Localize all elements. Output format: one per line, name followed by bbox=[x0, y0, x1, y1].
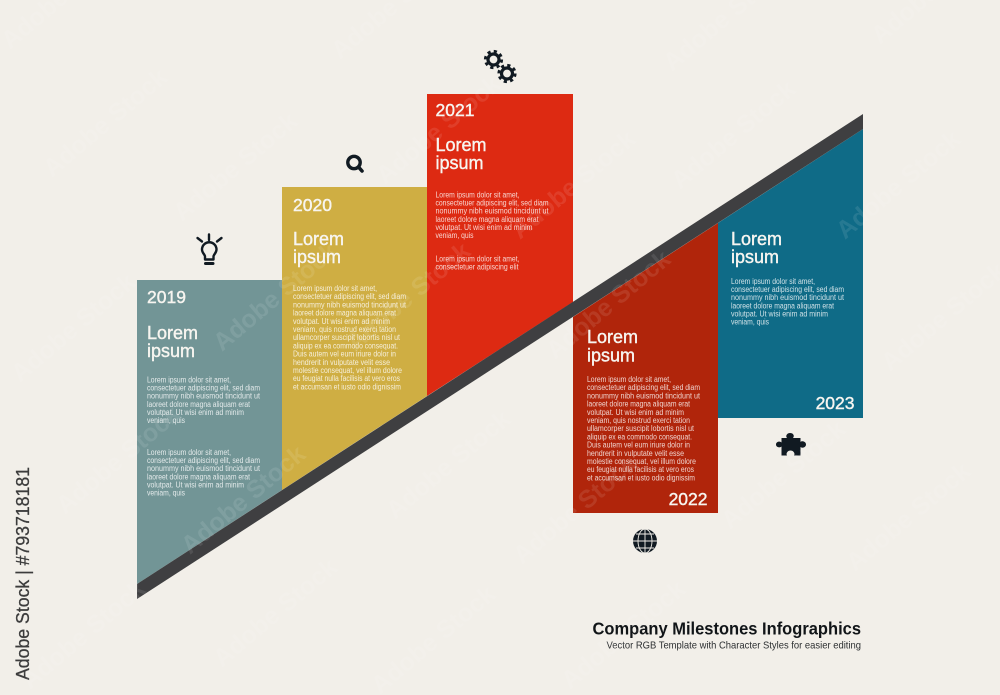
watermarks: Adobe Stock bbox=[541, 245, 676, 365]
watermarks: Adobe Stock bbox=[716, 415, 851, 535]
subtitle: Vector RGB Template with Character Styles for easier editing bbox=[606, 640, 861, 652]
panel: 2022: Lorem ipsum dolor sit amet, bbox=[587, 375, 671, 384]
panel: 2022 bbox=[573, 223, 718, 513]
watermarks: Adobe Stock bbox=[208, 553, 343, 673]
panel: 2020: eu feugiat nulla facilisis at vero eros bbox=[293, 374, 400, 383]
panel: 2019: Lorem bbox=[147, 323, 198, 343]
panel: 2020 bbox=[282, 187, 427, 490]
panel: 2021: consectetuer adipiscing elit bbox=[436, 263, 519, 272]
panel: 2021: Lorem bbox=[436, 135, 487, 155]
icon: gears bbox=[485, 51, 515, 82]
panel: 2021: consectetuer adipiscing elit, sed diam bbox=[436, 199, 548, 208]
panel: 2023: nonummy nibh euismod tincidunt ut bbox=[731, 293, 845, 302]
panel: 2021: ipsum bbox=[436, 153, 484, 173]
panel: 2022: nonummy nibh euismod tincidunt ut bbox=[587, 391, 701, 400]
panel: 2020: aliquip ex ea commodo consequat. bbox=[293, 341, 398, 350]
panel: 2022: Lorem bbox=[587, 327, 638, 347]
panel: 2023: 2023 bbox=[816, 393, 854, 413]
panel: 2019: volutpat. Ut wisi enim ad minim bbox=[147, 408, 244, 417]
panel: 2021: laoreet dolore magna aliquam erat bbox=[436, 215, 539, 224]
panel: 2023: Lorem ipsum dolor sit amet, bbox=[731, 277, 815, 286]
panel: 2019: laoreet dolore magna aliquam erat bbox=[147, 472, 251, 481]
panel: 2019: consectetuer adipiscing elit, sed diam bbox=[147, 456, 260, 465]
panel: 2020: 2020 bbox=[293, 195, 332, 215]
panel: 2020: ullamcorper suscipit lobortis nisl ut bbox=[293, 333, 401, 342]
panel: 2020: Lorem ipsum dolor sit amet, bbox=[293, 284, 377, 293]
watermarks: Adobe Stock bbox=[168, 107, 303, 227]
watermarks: Adobe Stock bbox=[508, 450, 643, 570]
panel: 2020: nonummy nibh euismod tincidunt ut bbox=[293, 300, 407, 309]
icon: magnifier bbox=[348, 156, 362, 171]
panel: 2020: laoreet dolore magna aliquam erat bbox=[293, 309, 397, 318]
icon: light bulb bbox=[198, 234, 222, 264]
panel: 2019: Lorem ipsum dolor sit amet, bbox=[147, 376, 231, 384]
panel: 2022: Duis autem vel eum iriure dolor in bbox=[587, 441, 690, 450]
panel: 2021 bbox=[427, 94, 573, 396]
panel: 2021: Lorem ipsum dolor sit amet, bbox=[436, 190, 520, 200]
panel: 2021: volutpat. Ut wisi enim ad minim bbox=[436, 223, 532, 232]
stock id: Adobe Stock | #793718181 bbox=[12, 467, 33, 680]
panel: 2022: eu feugiat nulla facilisis at vero eros bbox=[587, 465, 694, 474]
panel: 2019 bbox=[137, 280, 282, 584]
panel: 2022: et accumsan et iusto odio dignissim bbox=[587, 473, 695, 482]
panel: 2020: hendrerit in vulputate velit esse bbox=[293, 358, 390, 367]
panel: 2022: ullamcorper suscipit lobortis nisl ut bbox=[587, 424, 695, 433]
panel: 2022: laoreet dolore magna aliquam erat bbox=[587, 400, 691, 409]
panel: 2023 bbox=[718, 129, 863, 418]
panel: 2023: laoreet dolore magna aliquam erat bbox=[731, 301, 835, 310]
panel: 2021: Lorem ipsum dolor sit amet, bbox=[436, 254, 520, 264]
panel: 2020: ipsum bbox=[293, 247, 341, 267]
panel: 2021: veniam, quis bbox=[436, 231, 474, 240]
panel: 2020: molestie consequat, vel illum dolore bbox=[293, 366, 402, 375]
panel: 2021: nonummy nibh euismod tincidunt ut bbox=[436, 207, 549, 216]
panel: 2019: volutpat. Ut wisi enim ad minim bbox=[147, 480, 244, 489]
panel: 2022: ipsum bbox=[587, 346, 635, 366]
panel: 2019: laoreet dolore magna aliquam erat bbox=[147, 400, 251, 409]
panel: 2020: consectetuer adipiscing elit, sed diam bbox=[293, 292, 406, 301]
panel: 2022: aliquip ex ea commodo consequat. bbox=[587, 432, 692, 441]
watermarks: Adobe Stock bbox=[556, 575, 691, 695]
icon: puzzle piece bbox=[776, 433, 806, 456]
panel: 2023: volutpat. Ut wisi enim ad minim bbox=[731, 309, 828, 318]
panel: 2021: 2021 bbox=[436, 100, 474, 120]
watermarks: Adobe Stock bbox=[506, 125, 641, 245]
panel: 2019: nonummy nibh euismod tincidunt ut bbox=[147, 392, 261, 401]
panel: 2023: Lorem bbox=[731, 229, 782, 249]
panel: 2019: Lorem ipsum dolor sit amet, bbox=[147, 448, 231, 457]
watermarks: Adobe Stock bbox=[6, 268, 141, 388]
panel: 2023: consectetuer adipiscing elit, sed diam bbox=[731, 285, 844, 294]
watermarks: Adobe Stock bbox=[841, 457, 976, 577]
watermarks: Adobe Stock bbox=[831, 125, 966, 245]
title: Company Milestones Infographics bbox=[592, 618, 861, 638]
watermarks: Adobe Stock bbox=[38, 63, 173, 183]
panel: 2022: molestie consequat, vel illum dolore bbox=[587, 457, 696, 466]
diagonal band bbox=[137, 114, 863, 599]
panel: 2023: ipsum bbox=[731, 247, 779, 267]
watermarks: Adobe Stock bbox=[16, 575, 151, 695]
watermarks: Adobe Stock bbox=[51, 400, 186, 520]
panel: 2020: veniam, quis nostrud exerci tation bbox=[293, 325, 396, 334]
panel: 2020: et accumsan et iusto odio dignissim bbox=[293, 382, 401, 391]
panel: 2020: Lorem bbox=[293, 229, 344, 249]
panel: 2020: volutpat. Ut wisi enim ad minim bbox=[293, 317, 390, 326]
panel: 2019: consectetuer adipiscing elit, sed diam bbox=[147, 384, 260, 393]
watermarks: Adobe Stock bbox=[381, 405, 516, 525]
panel: 2022: 2022 bbox=[669, 489, 708, 509]
panel: 2022: volutpat. Ut wisi enim ad minim bbox=[587, 408, 684, 417]
watermarks: Adobe Stock bbox=[371, 70, 506, 190]
panel: 2023: veniam, quis bbox=[731, 318, 769, 326]
watermarks: Adobe Stock bbox=[176, 440, 311, 560]
watermarks: Adobe Stock bbox=[666, 75, 801, 195]
watermarks: Adobe Stock bbox=[208, 237, 343, 357]
panel: 2022: consectetuer adipiscing elit, sed diam bbox=[587, 383, 700, 392]
panel: 2022: hendrerit in vulputate velit esse bbox=[587, 449, 684, 458]
panel: 2019: veniam, quis bbox=[147, 416, 185, 425]
panel: 2019: nonummy nibh euismod tincidunt ut bbox=[147, 464, 261, 473]
panel: 2019: veniam, quis bbox=[147, 488, 185, 498]
panel: 2019: ipsum bbox=[147, 341, 195, 361]
panel: 2020: Duis autem vel eum iriure dolor in bbox=[293, 350, 396, 359]
panel: 2022: veniam, quis nostrud exerci tation bbox=[587, 416, 690, 425]
icon: globe bbox=[633, 529, 657, 553]
watermarks: Adobe Stock bbox=[341, 237, 476, 357]
panel: 2019: 2019 bbox=[147, 287, 186, 307]
